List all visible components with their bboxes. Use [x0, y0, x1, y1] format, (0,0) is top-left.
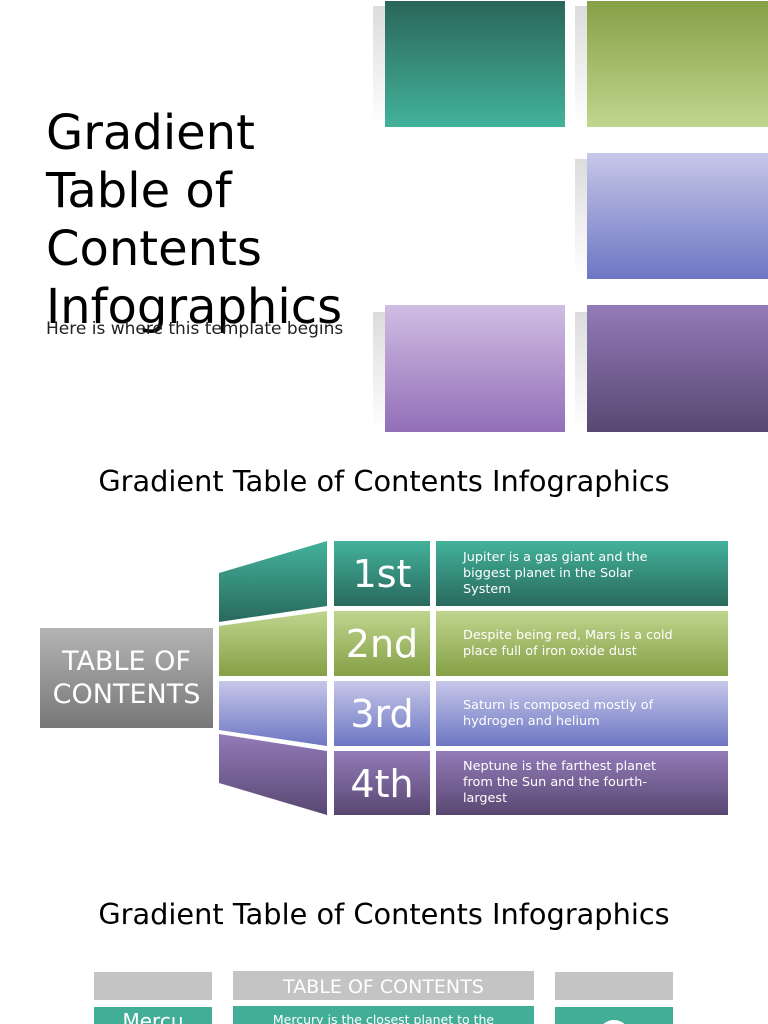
- title: Contents: [46, 221, 262, 277]
- TOC label box: [40, 628, 213, 728]
- row 2: Despite being red, Mars is a cold: [463, 628, 673, 642]
- row 1: 1st: [353, 552, 411, 596]
- subtitle: Here is where this template begins: [46, 319, 343, 339]
- row 4: from the Sun and the fourth-: [463, 775, 647, 790]
- heading 3: Gradient Table of Contents Infographics: [98, 897, 670, 931]
- row 4: 4th: [350, 762, 414, 806]
- row 3: 3rd: [350, 692, 414, 736]
- tile: blue: [587, 153, 768, 279]
- row 3: [334, 681, 728, 746]
- row 2: place full of iron oxide dust: [463, 644, 637, 658]
- title: Table of: [46, 163, 232, 219]
- tile: green: [587, 1, 768, 127]
- row 4: [334, 751, 728, 815]
- row 3: Saturn is composed mostly of: [463, 698, 653, 712]
- bottom table: TABLE OF CONTENTS: [283, 976, 484, 998]
- row 1: Jupiter is a gas giant and the: [463, 550, 648, 564]
- title: [46, 105, 342, 335]
- row 4: largest: [463, 791, 507, 806]
- row 1: [334, 541, 728, 606]
- row 2: 2nd: [346, 622, 418, 666]
- heading 2: Gradient Table of Contents Infographics: [98, 464, 670, 498]
- tile: teal: [385, 1, 565, 127]
- title: Gradient: [46, 105, 255, 161]
- title: Infographics: [46, 279, 342, 335]
- panel: gradient tiles: [373, 1, 768, 432]
- TOC label box: CONTENTS: [53, 679, 200, 710]
- row 1: biggest planet in the Solar: [463, 566, 633, 580]
- tile: lilac: [385, 305, 565, 432]
- row 3: hydrogen and helium: [463, 714, 600, 728]
- TOC label box: TABLE OF: [62, 646, 191, 677]
- tile: purple: [587, 305, 768, 432]
- row 4: Neptune is the farthest planet: [463, 759, 656, 774]
- bottom table: [94, 971, 673, 1024]
- row 2: [334, 611, 728, 676]
- row 1: System: [463, 582, 511, 596]
